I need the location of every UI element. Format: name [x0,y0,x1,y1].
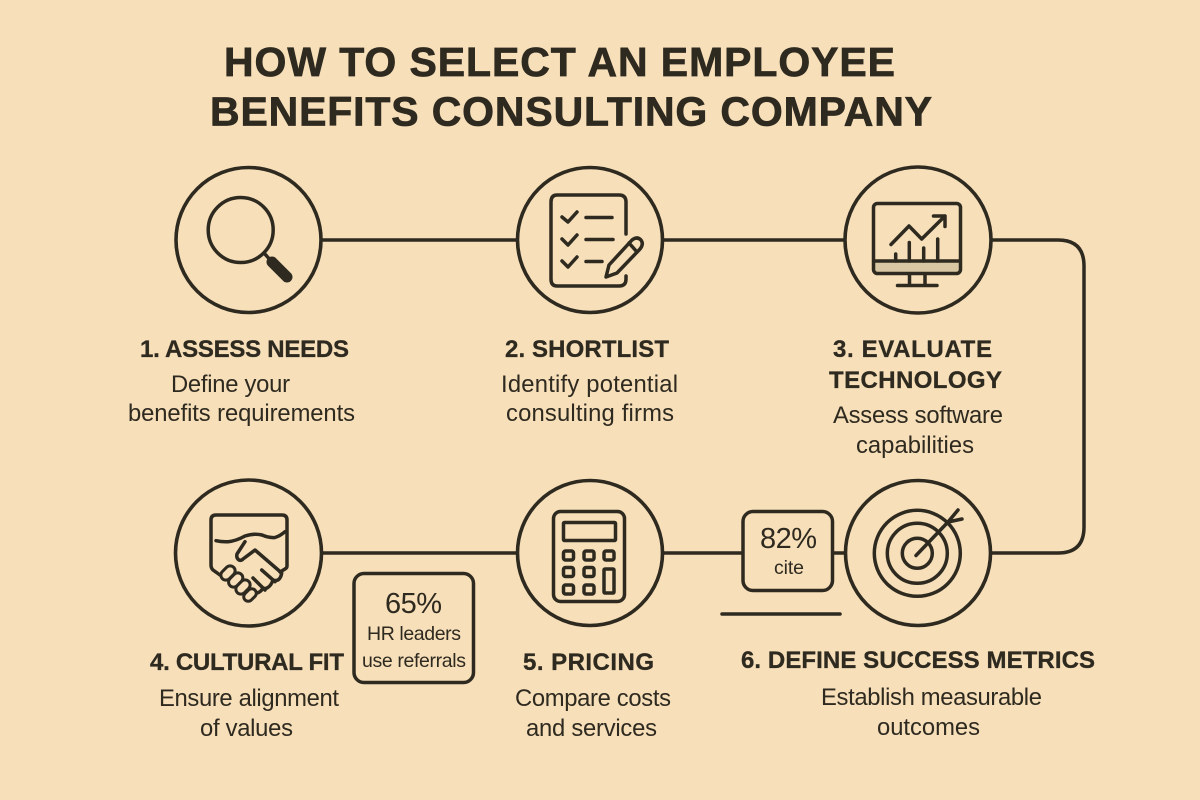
description: step 3 [833,402,1003,459]
description: step 1: Define your [171,371,290,398]
title [210,39,932,134]
description: step 2: consulting firms [506,400,674,427]
heading: step 3 [829,336,1002,394]
description: step 6: outcomes [877,714,980,741]
callout: 65% HR leaders use referrals [354,574,474,682]
description: step 6: Establish measurable [821,684,1042,711]
description: step 4 [159,685,339,742]
description: step 1 [128,371,355,427]
step 5: pricing [515,480,671,742]
callout: 65% HR leaders use referrals: 65% [385,588,442,620]
icon: handshake [176,480,322,626]
step 6: define success metrics [741,480,1095,741]
callout: 65% HR leaders use referrals: use referrals [362,650,466,672]
heading: step 3: 3. EVALUATE [833,336,992,363]
description: step 1: benefits requirements [128,400,355,427]
title: BENEFITS CONSULTING COMPANY [210,88,932,134]
description: step 3: Assess software [833,402,1003,429]
heading: step 5: 5. PRICING [523,649,654,676]
description: step 4: Ensure alignment [159,685,339,712]
step 3: evaluate technology [829,167,1003,459]
icon: target with arrow [846,480,990,626]
heading: step 2: 2. SHORTLIST [505,336,669,363]
icon: calculator [518,480,662,626]
heading: step 6: 6. DEFINE SUCCESS METRICS [741,647,1095,674]
step 4: cultural fit [150,480,344,742]
heading: step 1: 1. ASSESS NEEDS [140,336,349,363]
description: step 2: Identify potential [501,371,678,398]
heading: step 3: TECHNOLOGY [829,367,1002,394]
description: step 5: Compare costs [515,685,671,712]
description: step 6 [821,684,1042,741]
icon: monitor with rising chart [845,167,991,313]
callout: 82% cite: cite [774,557,804,579]
connector path between steps [322,240,1084,553]
title: HOW TO SELECT AN EMPLOYEE [224,39,895,85]
callout: 82% cite: 82% [760,523,817,555]
description: step 5 [515,685,671,742]
description: step 5: and services [526,715,657,742]
heading: step 4: 4. CULTURAL FIT [150,649,344,676]
description: step 4: of values [200,715,293,742]
description: step 3: capabilities [856,432,974,459]
callout: 82% cite [743,512,832,590]
icon: checklist with pencil [518,168,662,312]
icon: magnifying glass [176,168,321,312]
callout: 65% HR leaders use referrals: HR leaders [367,623,461,645]
step 2: shortlist [501,168,678,427]
step 1: assess needs [128,168,355,427]
description: step 2 [501,371,678,427]
